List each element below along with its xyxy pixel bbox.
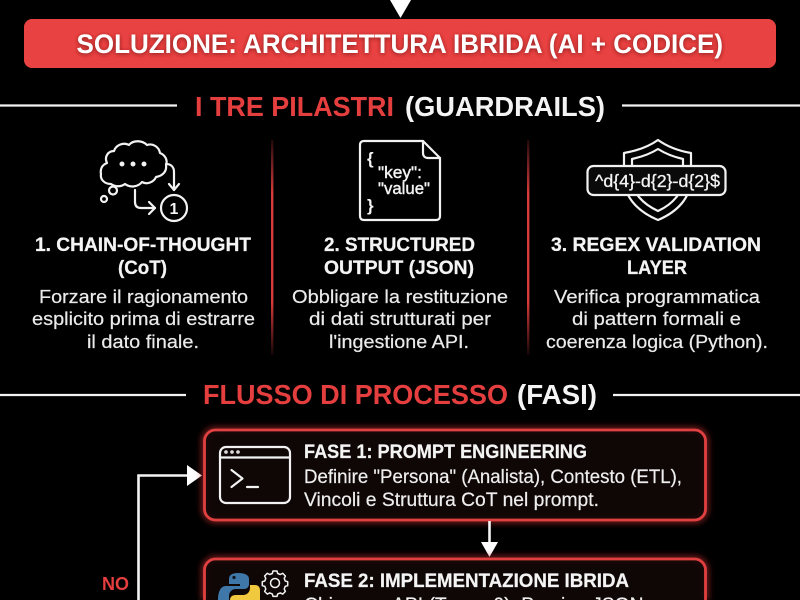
description (32, 286, 255, 352)
icon: json document: { (367, 149, 374, 168)
icon: json document: } (367, 196, 374, 215)
icon: python logo (218, 573, 260, 600)
title: (CoT) (118, 257, 167, 279)
heading: i tre pilastri (0, 91, 800, 122)
banner: solution: SOLUZIONE: ARCHITETTURA IBRIDA (AI + CODICE) (76, 29, 723, 59)
title (35, 234, 251, 279)
top arrow (390, 0, 411, 18)
heading: i tre pilastri: I TRE PILASTRI (195, 91, 394, 122)
title: OUTPUT (JSON) (324, 257, 474, 279)
panel: chain-of-thought: 1 (170, 201, 179, 218)
title: 1. CHAIN-OF-THOUGHT (35, 234, 251, 256)
description: Obbligare la restituzione (292, 286, 508, 307)
description: Vincoli e Struttura CoT nel prompt. (304, 490, 599, 511)
column dividers (271, 140, 529, 355)
description: esplicito prima di estrarre (32, 308, 255, 329)
panel: structured output (292, 141, 508, 352)
banner: solution (24, 19, 776, 68)
title: 2. STRUCTURED (324, 234, 475, 256)
icon: shield with regex: ^d{4}-d{2}-d{2}$ (595, 171, 720, 191)
heading: i tre pilastri: (GUARDRAILS) (405, 91, 605, 122)
description (546, 286, 768, 352)
description: l'ingestione API. (329, 331, 469, 352)
description (304, 467, 682, 511)
icon: json document: "value" (378, 180, 430, 198)
description: Forzare il ragionamento (39, 286, 248, 307)
icon: gear (262, 571, 288, 596)
icon: json document: "key": (378, 164, 422, 182)
feedback arrow (138, 465, 202, 600)
panel: chain-of-thought (32, 141, 255, 352)
icon: shield with regex (588, 140, 726, 220)
description: Verifica programmatica (554, 286, 761, 307)
icon: terminal (220, 447, 290, 503)
arrow: fase 1 to fase 2 (481, 521, 498, 557)
icon: thought cloud (101, 141, 187, 221)
description: coerenza logica (Python). (546, 331, 768, 352)
description: il dato finale. (87, 331, 199, 352)
panel: fase 1 (204, 430, 706, 520)
banner: solution: SOLUZIONE: ARCHITETTURA IBRIDA (AI + CODICE) (76, 30, 723, 60)
title (324, 234, 475, 279)
heading: flusso di processo (0, 379, 800, 410)
panel: regex validation (546, 140, 768, 352)
panel: fase 2 (204, 559, 706, 600)
title: LAYER (627, 257, 687, 279)
description: Definire "Persona" (Analista), Contesto (ETL), (304, 467, 682, 488)
icon: json document (360, 141, 440, 220)
heading: flusso di processo: FLUSSO DI PROCESSO (203, 379, 508, 410)
description: di dati strutturati per (309, 308, 491, 329)
title: FASE 2: IMPLEMENTAZIONE IBRIDA (304, 570, 629, 592)
title: FASE 1: PROMPT ENGINEERING (304, 441, 587, 463)
description: di pattern formali e (572, 308, 741, 329)
title (551, 234, 761, 279)
title: 3. REGEX VALIDATION (551, 234, 761, 256)
label: no: NO (102, 574, 129, 594)
description (292, 286, 508, 352)
heading: flusso di processo: (FASI) (517, 379, 597, 410)
